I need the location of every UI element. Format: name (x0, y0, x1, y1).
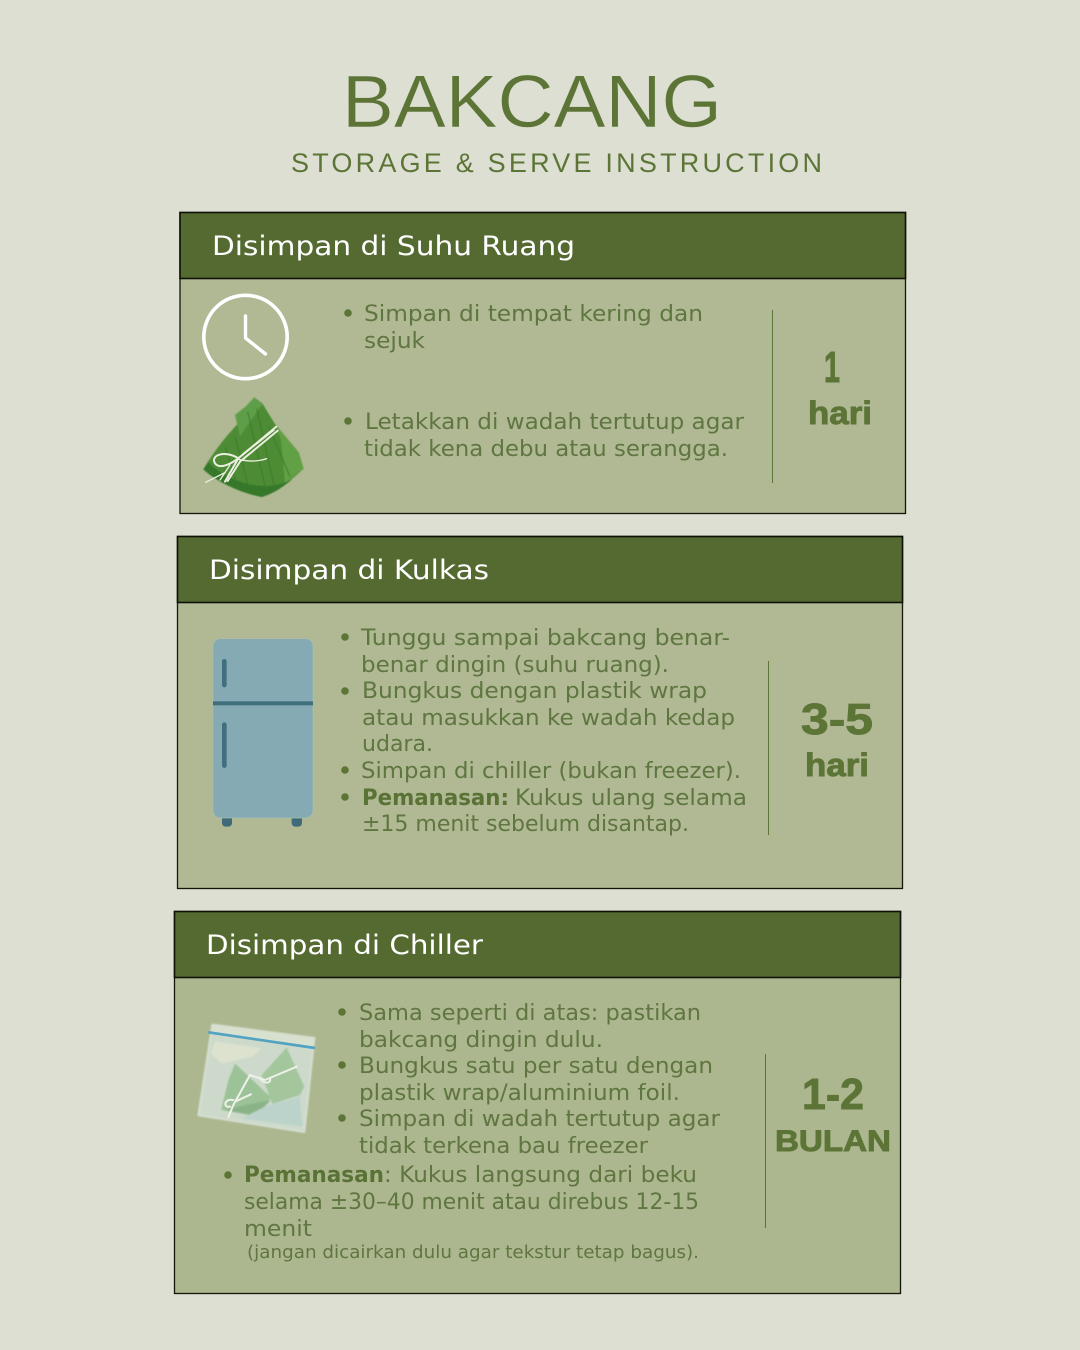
duration: 1 hari: 1 (824, 343, 840, 392)
panel header: Disimpan di Chiller (206, 930, 484, 961)
panel header (178, 536, 902, 602)
reheating note: selama ±30–40 menit atau direbus 12-15 (244, 1190, 699, 1215)
duration: 3-5 hari: 3-5 (801, 695, 873, 744)
bullet list: Pemanasan: (362, 786, 509, 811)
reheating note (224, 1163, 699, 1263)
reheating note: Pemanasan (244, 1163, 384, 1188)
bullet list: Bungkus dengan plastik wrap (362, 679, 707, 704)
bullet list: Tunggu sampai bakcang benar- (360, 626, 730, 651)
panel body (174, 912, 900, 1294)
duration: 3-5 hari: hari (805, 747, 869, 783)
bullet list: Letakkan di wadah tertutup agar (365, 410, 745, 435)
divider (772, 310, 774, 483)
bullet list: tidak terkena bau freezer (359, 1134, 649, 1159)
icon: fridge (213, 639, 313, 827)
bullet list: tidak kena debu atau serangga. (364, 437, 728, 462)
panel body (180, 212, 906, 514)
bullet list: ±15 menit sebelum disantap. (362, 812, 689, 837)
panel: chiller storage (174, 912, 900, 1294)
panel header (174, 912, 900, 978)
divider (768, 661, 770, 835)
bullet list: Kukus ulang selama (515, 786, 747, 811)
bullet list (344, 302, 745, 462)
panel header: Disimpan di Suhu Ruang (212, 231, 575, 262)
duration: 3-5 hari (801, 695, 873, 783)
divider (764, 1054, 766, 1228)
panel header: Disimpan di Kulkas (209, 555, 489, 586)
panel: fridge storage (178, 536, 902, 888)
bullet list: Sama seperti di atas: pastikan (359, 1001, 701, 1026)
bullet list: bakcang dingin dulu. (359, 1028, 603, 1053)
panel: room temperature storage (180, 212, 906, 514)
title: BAKCANG (342, 60, 722, 143)
icon: bakcang in plastic bag (198, 1025, 315, 1132)
duration: 1-2 bulan: 1-2 (802, 1070, 864, 1119)
duration: 1 hari: hari (808, 395, 872, 431)
bullet list: Simpan di chiller (bukan freezer). (361, 759, 741, 784)
bullet list: udara. (362, 732, 433, 757)
icon: clock (204, 295, 287, 379)
bullet list: benar dingin (suhu ruang). (361, 653, 669, 678)
bullet list: Simpan di tempat kering dan (364, 302, 703, 327)
bullet list: atau masukkan ke wadah kedap (362, 706, 735, 731)
bullet list: plastik wrap/aluminium foil. (359, 1081, 680, 1106)
panel body (178, 536, 902, 888)
subtitle: STORAGE & SERVE INSTRUCTION (291, 148, 822, 178)
bullet list: sejuk (364, 329, 425, 354)
reheating note: menit (244, 1217, 312, 1242)
duration: 1-2 bulan: BULAN (775, 1125, 891, 1158)
duration: 1-2 bulan (775, 1070, 891, 1158)
bullet list (341, 626, 747, 837)
reheating note: : Kukus langsung dari beku (384, 1163, 697, 1188)
reheating note: (jangan dicairkan dulu agar tekstur tetap bagus). (247, 1243, 699, 1263)
duration: 1 hari (808, 343, 872, 431)
panel header (180, 212, 906, 278)
bullet list: Simpan di wadah tertutup agar (359, 1107, 721, 1132)
bullet list (338, 1001, 721, 1159)
icon: bakcang (203, 397, 304, 497)
bullet list: Bungkus satu per satu dengan (359, 1054, 713, 1079)
